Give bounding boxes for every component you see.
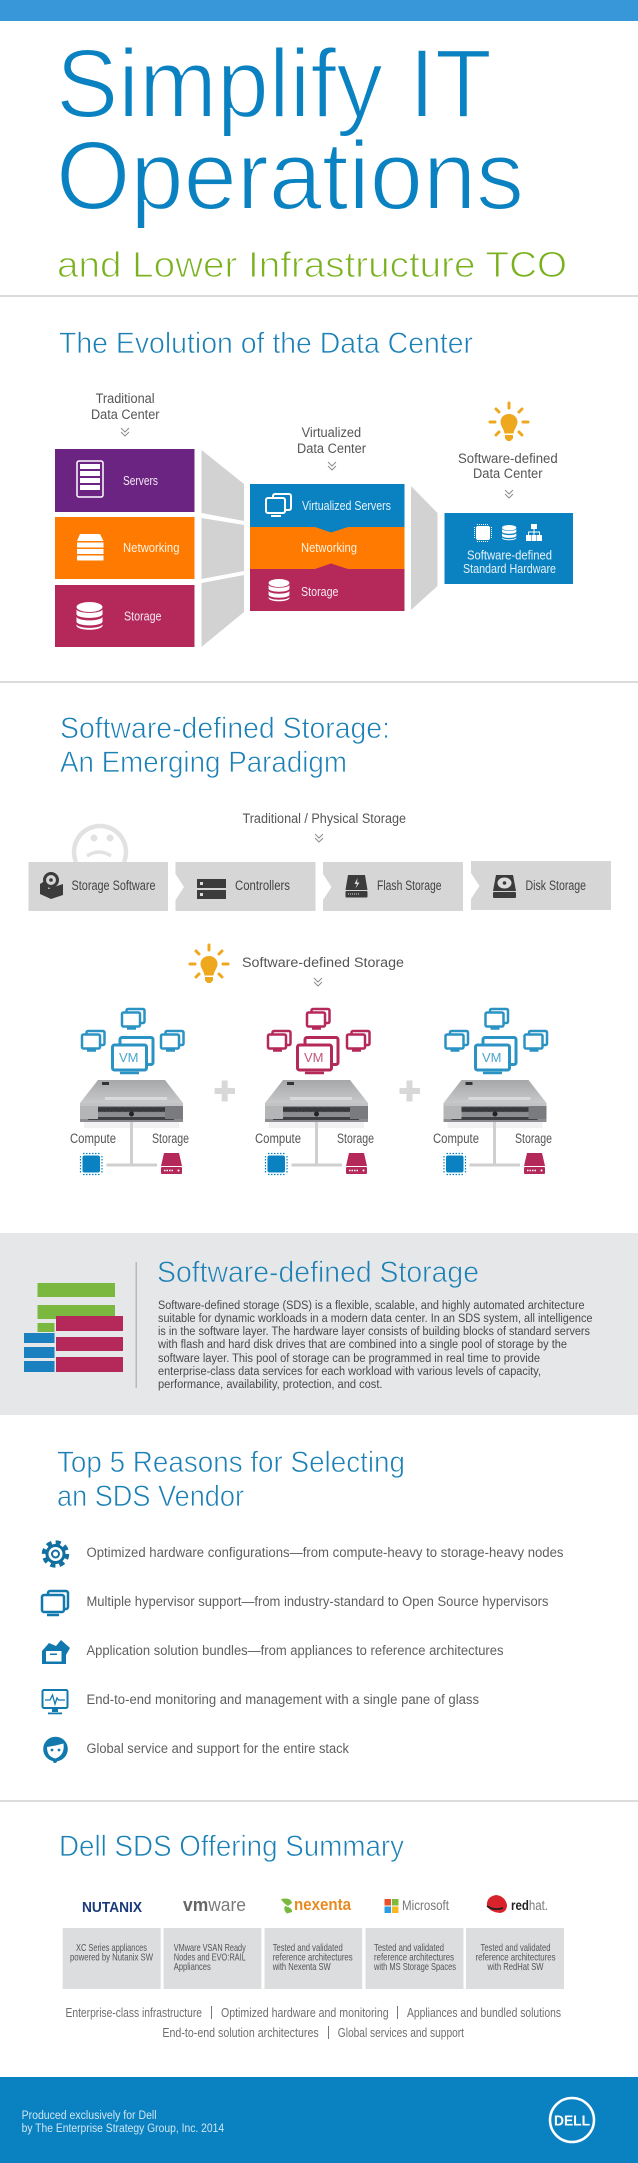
node two: Storage (337, 1131, 374, 1146)
node two: Compute (255, 1131, 301, 1146)
offering card: nexenta: Tested and validated (273, 1942, 343, 1954)
credit text (22, 2110, 225, 2135)
offering card: vmware (164, 1928, 261, 1989)
label: virtualized data center (297, 425, 366, 456)
definition text: Software-defined storage (SDS) is a flexible, scalable, and highly automated architecture (158, 1300, 584, 1312)
servers block (55, 449, 194, 512)
offering card: red hat: Tested and validated (480, 1942, 551, 1954)
reason one: Optimized hardware configurations—from compute-heavy to storage-heavy nodes (86, 1545, 564, 1560)
logo: dell: DELL (554, 2112, 590, 2130)
title: Simplify IT (56, 29, 492, 138)
title: and Lower Infrastructure TCO (57, 244, 567, 285)
reason four (42, 1690, 479, 1714)
heading: evolution of the data center: The Evolution of the Data Center (59, 327, 473, 360)
benefits summary: Enterprise-class infrastructure (66, 2006, 202, 2020)
credit text: Produced exclusively for Dell (22, 2110, 157, 2122)
offering card: vmware: VMware VSAN Ready (174, 1942, 246, 1954)
virtualized layers: Networking (301, 540, 357, 555)
label: traditional data center: Traditional (96, 391, 155, 406)
footer (0, 2077, 638, 2163)
definition text: performance, availability, protection, and cost. (158, 1379, 382, 1391)
label: traditional data center (91, 391, 160, 422)
label: software-defined storage: Software-defined Storage (242, 955, 404, 970)
heading: software-defined storage paradigm: An Emerging Paradigm (60, 746, 347, 779)
storage software (28, 862, 168, 911)
offering card: nutanix (63, 1928, 161, 1989)
offering card: vmware: Nodes and EVO:RAIL (174, 1952, 246, 1964)
panel: software-defined data center (444, 403, 573, 584)
reason five: Global service and support for the entire stack (86, 1741, 349, 1756)
storage block: Storage (124, 608, 162, 624)
definition text: suitable for dynamic workloads in a modern data center. In an SDS system, all intelligence (158, 1313, 592, 1325)
node three: VM (482, 1050, 502, 1065)
title: Operations (56, 121, 524, 230)
label: virtualized data center: Virtualized (302, 425, 361, 440)
logo: vmware: vmware (183, 1895, 246, 1915)
logo: nutanix: NUTANIX (82, 1899, 142, 1916)
controllers: Controllers (235, 878, 290, 893)
heading: top 5 reasons: Top 5 Reasons for Selecting (57, 1446, 405, 1479)
heading: top 5 reasons: an SDS Vendor (57, 1480, 244, 1513)
offering card: red hat (466, 1928, 564, 1989)
reason two (42, 1591, 549, 1615)
offering card: nexenta: reference architectures (273, 1952, 353, 1964)
node one: Compute (70, 1131, 116, 1146)
plus sign (400, 1080, 420, 1102)
reason one (44, 1542, 564, 1566)
flash storage (323, 862, 463, 911)
panel: traditional physical storage (28, 811, 611, 911)
servers block: Servers (123, 473, 158, 488)
icon: confused face (74, 826, 126, 862)
label: traditional physical storage: Traditional / Physical Storage (242, 811, 406, 826)
offering card: nexenta (264, 1928, 362, 1989)
logo: red hat: redhat. (511, 1897, 548, 1913)
offering card: microsoft: with MS Storage Spaces (373, 1961, 456, 1973)
reason two: Multiple hypervisor support—from industry-standard to Open Source hypervisors (86, 1594, 549, 1609)
panel: virtualized data center (250, 425, 404, 611)
label: software-defined data center: Data Center (473, 466, 543, 481)
heading: Software-defined Storage (157, 1256, 479, 1289)
offering card: red hat: with RedHat SW (487, 1961, 544, 1973)
definition text: software layer. This pool of storage can be programmed in real time to provide (158, 1353, 540, 1365)
offering card: nexenta: with Nexenta SW (272, 1961, 331, 1973)
label: software-defined data center (458, 451, 558, 481)
panel: vendor offerings (63, 1895, 564, 1989)
controllers (176, 862, 316, 911)
heading: top 5 reasons (57, 1446, 405, 1513)
credit text: by The Enterprise Strategy Group, Inc. 2014 (22, 2123, 225, 2135)
icon: stacked blocks (24, 1283, 123, 1372)
node three: Storage (515, 1131, 552, 1146)
benefits summary: Appliances and bundled solutions (407, 2006, 561, 2020)
disk storage (471, 861, 611, 910)
networking block (55, 517, 194, 579)
offering card: microsoft: reference architectures (374, 1952, 454, 1964)
definition text (157, 1300, 593, 1391)
offering card: microsoft (366, 1928, 464, 1989)
node one (70, 1009, 189, 1174)
label: software-defined data center: Software-defined (458, 451, 558, 466)
arrow: virtualized to software-defined (411, 486, 438, 610)
node three (433, 1009, 552, 1174)
arrows: traditional to virtualized (202, 450, 244, 647)
logo: microsoft: Microsoft (402, 1897, 449, 1913)
panel: software-defined storage definition (0, 1233, 638, 1415)
offering card: microsoft: Tested and validated (374, 1942, 444, 1954)
software-defined hardware block: Standard Hardware (463, 562, 556, 576)
label: traditional data center: Data Center (91, 407, 160, 422)
virtualized layers: Storage (301, 584, 338, 599)
heading: software-defined storage paradigm: Software-defined Storage: (60, 712, 390, 745)
offering card: vmware: Appliances (174, 1961, 211, 1973)
disk storage: Disk Storage (526, 878, 586, 893)
offering card: nutanix: powered by Nutanix SW (70, 1952, 153, 1964)
networking block: Networking (123, 540, 180, 555)
storage block (55, 585, 194, 647)
reason three (42, 1640, 504, 1664)
icon: light bulb (190, 945, 228, 983)
definition text: enterprise-class data services for each workload with various levels of capacity, (158, 1366, 541, 1378)
reason three: Application solution bundles—from appliances to reference architectures (86, 1643, 504, 1658)
reason four: End-to-end monitoring and management with a single pane of glass (86, 1692, 479, 1707)
storage software: Storage Software (72, 878, 156, 893)
software-defined hardware block: Software-defined (467, 548, 552, 562)
panel: reasons list (42, 1542, 564, 1763)
benefits summary: End-to-end solution architectures (162, 2026, 319, 2040)
logo: nexenta: nexenta (294, 1895, 351, 1914)
node three: Compute (433, 1131, 479, 1146)
logo: dell (550, 2098, 594, 2142)
offering card: nutanix: XC Series appliances (76, 1942, 147, 1954)
benefits summary (66, 2006, 561, 2040)
top colour bar (0, 0, 638, 21)
logo: red hat (487, 1895, 548, 1913)
benefits summary: Optimized hardware and monitoring (221, 2006, 389, 2020)
virtualized layers (250, 484, 404, 611)
heading: dell sds offering summary: Dell SDS Offering Summary (59, 1830, 404, 1863)
benefits summary: Global services and support (338, 2026, 464, 2040)
logo: microsoft (384, 1897, 449, 1913)
plus sign (214, 1080, 235, 1102)
icon: light bulb (490, 403, 528, 441)
offering card: red hat: reference architectures (476, 1952, 556, 1964)
panel: software-defined storage nodes (70, 945, 552, 1174)
heading: software-defined storage paradigm (60, 712, 390, 779)
software-defined hardware block (444, 513, 573, 584)
title (56, 29, 567, 285)
node two (255, 1009, 374, 1174)
label: virtualized data center: Data Center (297, 441, 366, 456)
node one: VM (119, 1050, 138, 1065)
node two: VM (304, 1050, 324, 1065)
definition text: with flash and hard disk drives that are combined into a single pool of storage by the (157, 1339, 567, 1351)
panel: traditional data center (55, 391, 194, 647)
reason five (43, 1737, 349, 1763)
definition text: is in the software layer. The hardware layer consists of building blocks of standard servers (158, 1326, 590, 1338)
node one: Storage (152, 1131, 189, 1146)
flash storage: Flash Storage (377, 878, 442, 893)
virtualized layers: Virtualized Servers (302, 498, 391, 513)
